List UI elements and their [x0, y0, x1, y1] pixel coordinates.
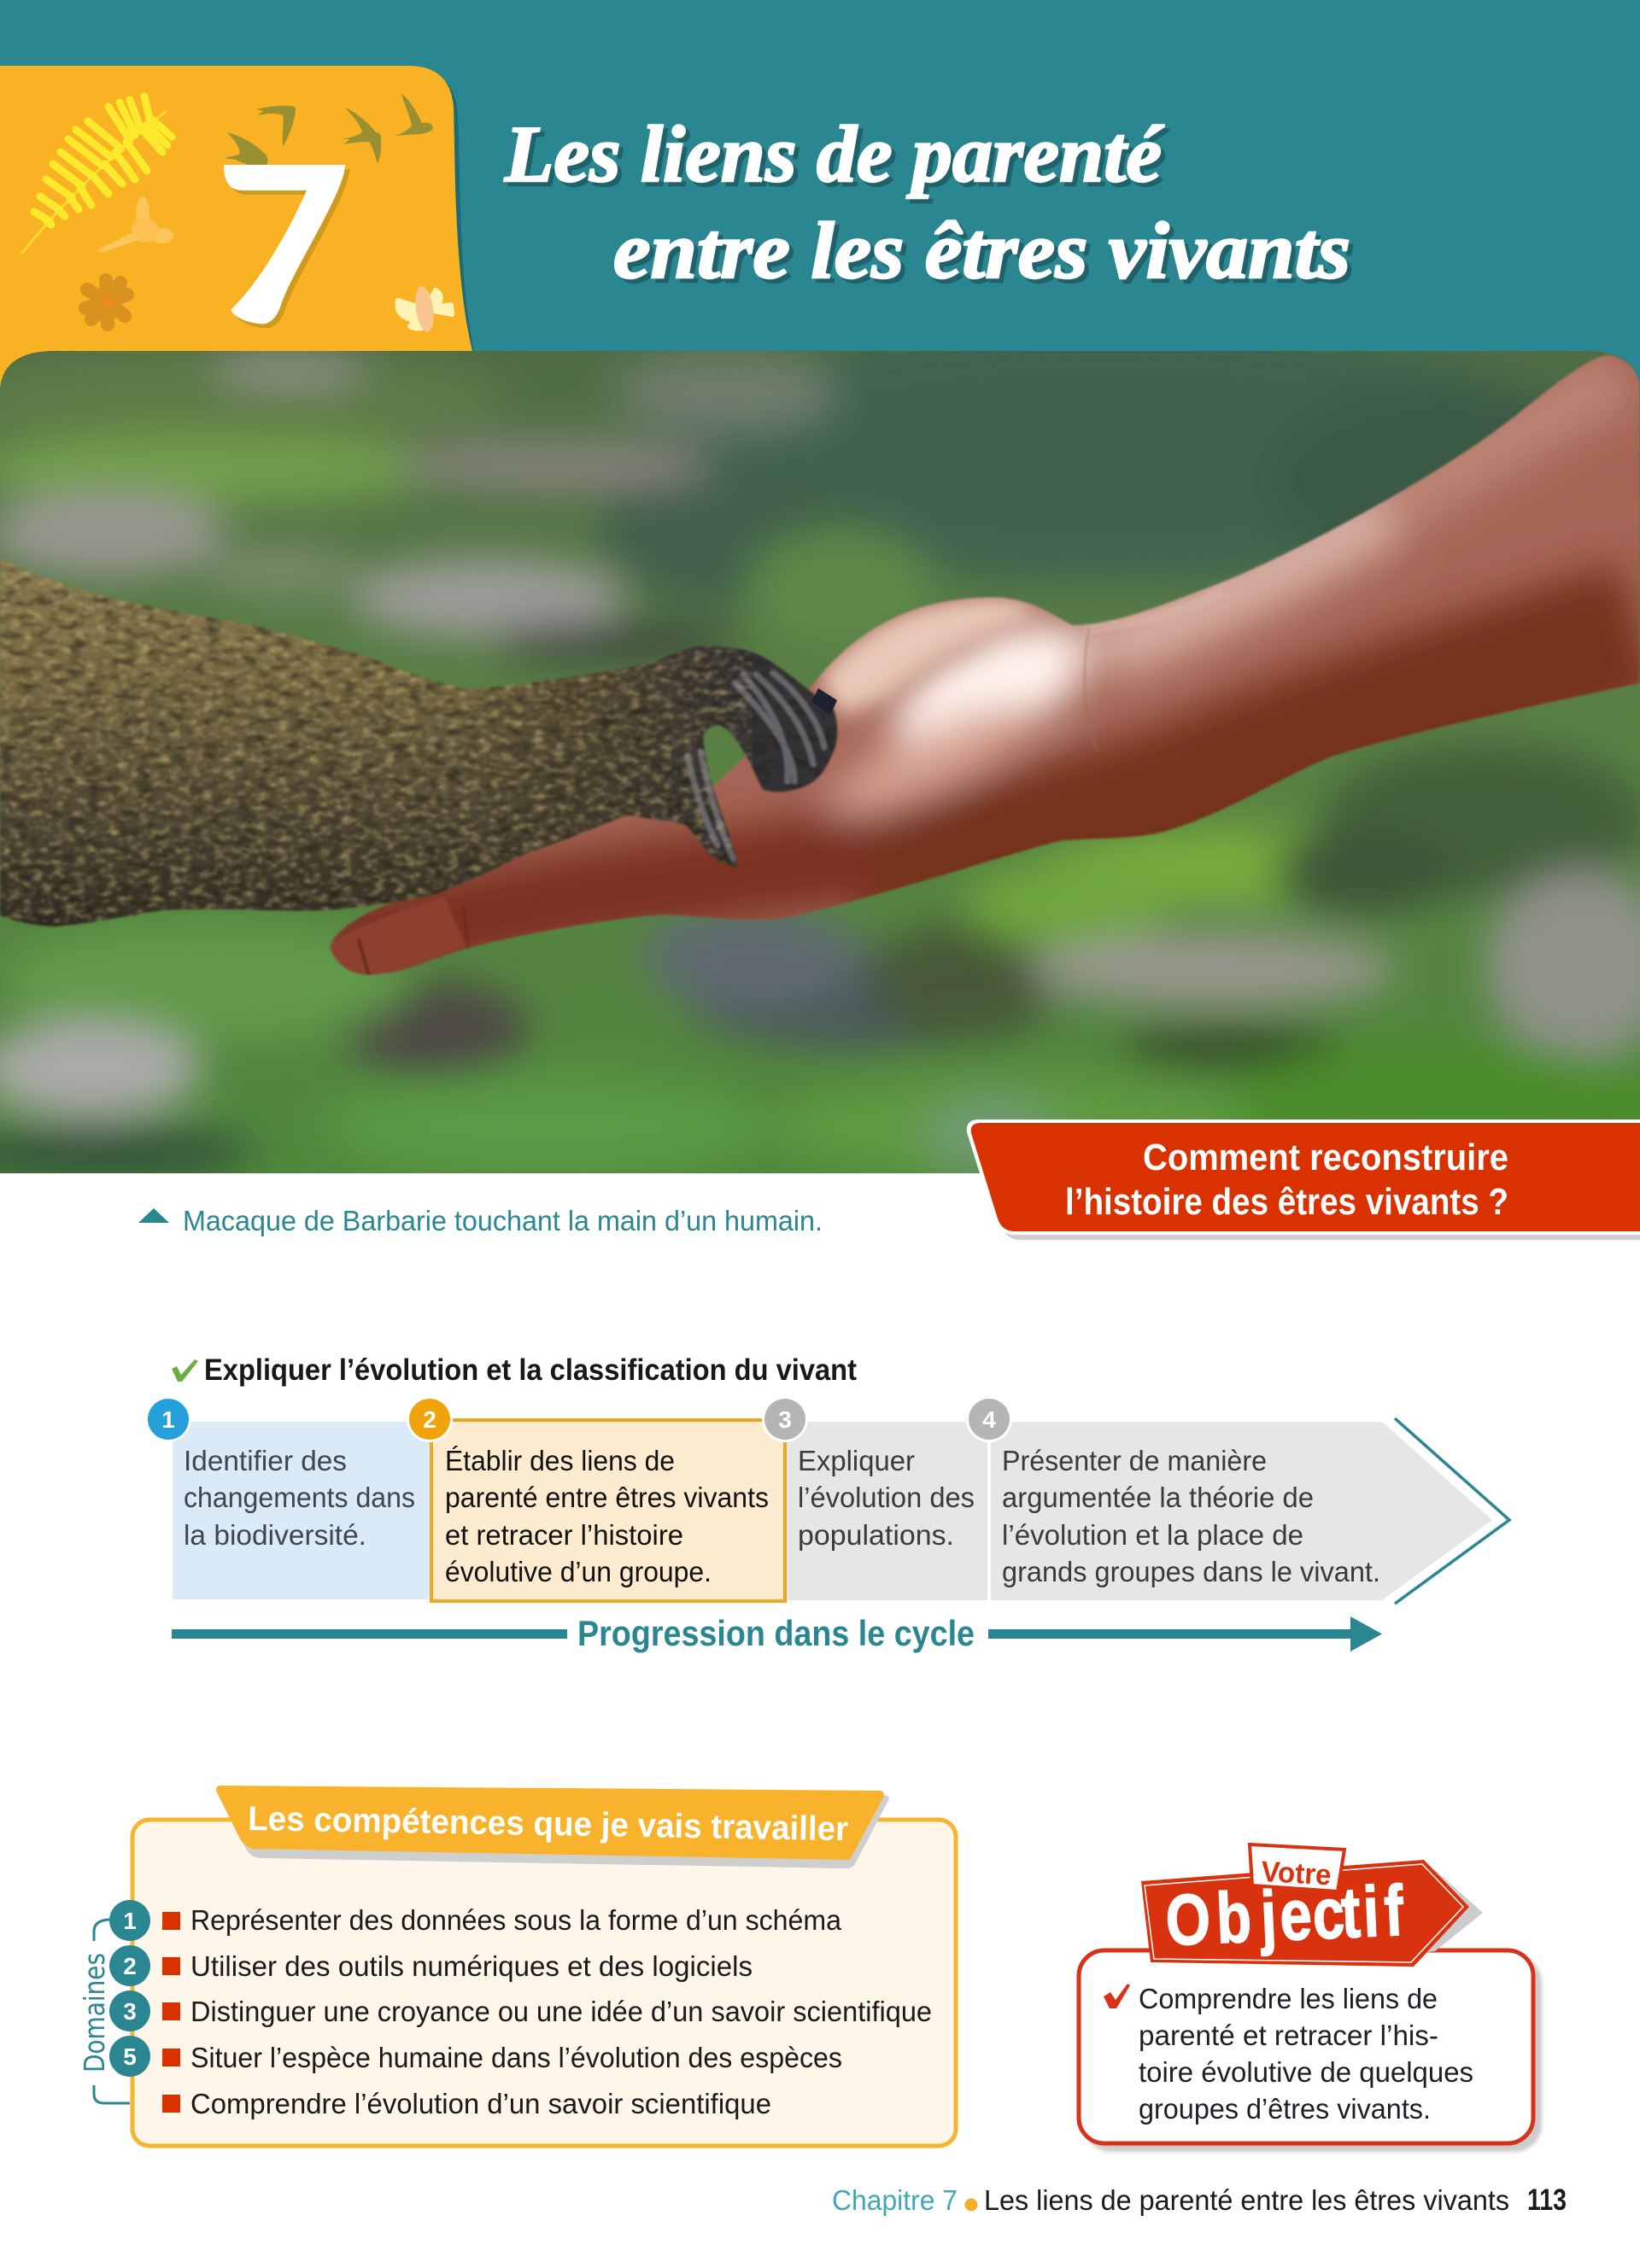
objective text: parenté et retracer l’his- — [1139, 2020, 1438, 2051]
objective text: Comprendre les liens de — [1139, 1983, 1438, 2014]
step 3 and 4 arrow panel: argumentée la théorie de — [1002, 1482, 1314, 1513]
step 2 highlighted panel: Établir des liens de — [445, 1445, 675, 1476]
number 7 — [224, 165, 349, 328]
title: entre les êtres vivants — [613, 207, 1350, 295]
macaque arm — [0, 547, 854, 931]
footer: Les liens de parenté entre les êtres vivants — [984, 2184, 1509, 2216]
step 3 and 4 arrow panel — [787, 1422, 1492, 1600]
panel: chapter number tab — [0, 66, 474, 401]
objective text: toire évolutive de quelques — [1139, 2056, 1473, 2088]
skills list: Représenter des données sous la forme d’un schéma — [190, 1904, 842, 1936]
step 3 and 4 arrow panel: Expliquer — [798, 1445, 915, 1476]
step 1 panel: la biodiversité. — [184, 1519, 366, 1551]
heading: skill with check mark: Expliquer l’évolution et la classification du vivant — [204, 1353, 857, 1387]
skills list: Distinguer une croyance ou une idée d’un savoir scientifique — [190, 1996, 932, 2027]
domains label: Domaines — [78, 1953, 111, 2072]
step 1 panel: changements dans — [184, 1482, 415, 1513]
skills list — [162, 1904, 932, 2119]
progression chart — [145, 1396, 1509, 1653]
step badges: 1 — [161, 1406, 175, 1433]
chevron — [1395, 1418, 1509, 1604]
sign: votre objectif: Objectif — [1164, 1871, 1406, 1961]
skills list: Comprendre l’évolution d’un savoir scientifique — [190, 2088, 771, 2119]
ribbon: skills title — [220, 1790, 887, 1866]
progression arrow — [172, 1613, 1382, 1653]
step 1 panel — [173, 1422, 430, 1599]
step badges: 2 — [423, 1406, 436, 1433]
banner: key question: Comment reconstruire — [1143, 1137, 1508, 1178]
photo: macaque touching a human hand — [0, 324, 1640, 1178]
step badges: 3 — [778, 1406, 792, 1433]
objective text — [1139, 1983, 1473, 2125]
step 3 and 4 arrow panel: l’évolution des — [798, 1482, 975, 1513]
step 3 and 4 arrow panel: populations. — [798, 1519, 954, 1551]
domains label — [78, 1920, 130, 2103]
icon: dragonfly — [97, 196, 173, 253]
domain badges: 1 — [123, 1908, 137, 1934]
step 2 highlighted panel: évolutive d’un groupe. — [445, 1556, 712, 1587]
footer: Chapitre 7 — [832, 2184, 958, 2216]
panel: skills — [78, 1790, 956, 2146]
domain badges: 3 — [123, 1998, 137, 2025]
blurred background — [0, 324, 1640, 1178]
step 2 highlighted panel: et retracer l’histoire — [445, 1519, 683, 1551]
banner: key question — [967, 1119, 1640, 1240]
title: Les liens de parenté — [504, 110, 1164, 199]
step badges: 4 — [982, 1406, 996, 1433]
icon: fern — [21, 96, 172, 254]
title — [504, 110, 1355, 300]
panel: objective — [1079, 1844, 1542, 2152]
skills list: Utiliser des outils numériques et des logiciels — [190, 1950, 753, 1982]
domain badges: 5 — [123, 2043, 137, 2070]
sign: votre objectif — [1141, 1844, 1483, 1967]
footer — [832, 2183, 1567, 2217]
objective text: groupes d’êtres vivants. — [1139, 2093, 1431, 2125]
skills list: Situer l’espèce humaine dans l’évolution des espèces — [190, 2042, 842, 2073]
domain badges — [109, 1900, 150, 2077]
step badges — [145, 1396, 1012, 1442]
footer: 113 — [1527, 2183, 1567, 2217]
title: entre les êtres vivants — [618, 211, 1355, 300]
human hand and forearm — [325, 350, 1640, 982]
step 2 highlighted panel — [431, 1420, 785, 1601]
label: votre — [1250, 1844, 1344, 1891]
icon: flower — [85, 280, 127, 324]
domain badges: 2 — [123, 1953, 137, 1979]
check mark — [1104, 1984, 1130, 2008]
step 1 panel: Identifier des — [184, 1445, 347, 1476]
monkey claw nail — [811, 688, 837, 716]
banner: key question: l’histoire des êtres vivants ? — [1065, 1181, 1508, 1223]
step 3 and 4 arrow panel: l’évolution et la place de — [1002, 1519, 1303, 1551]
step 2 highlighted panel: parenté entre êtres vivants — [445, 1482, 769, 1513]
label: votre: Votre — [1261, 1856, 1332, 1891]
photo caption: Macaque de Barbarie touchant la main d’un humain. — [183, 1205, 823, 1236]
step 3 and 4 arrow panel: Présenter de manière — [1002, 1445, 1267, 1476]
progression arrow: Progression dans le cycle — [577, 1613, 975, 1653]
title: Les liens de parenté — [508, 114, 1168, 203]
ribbon: skills title: Les compétences que je vais travailler — [248, 1800, 849, 1848]
icon: birds — [225, 93, 433, 165]
icon: bee on blossom — [397, 285, 452, 333]
header band — [0, 0, 1640, 401]
step 3 and 4 arrow panel: grands groupes dans le vivant. — [1002, 1556, 1380, 1587]
